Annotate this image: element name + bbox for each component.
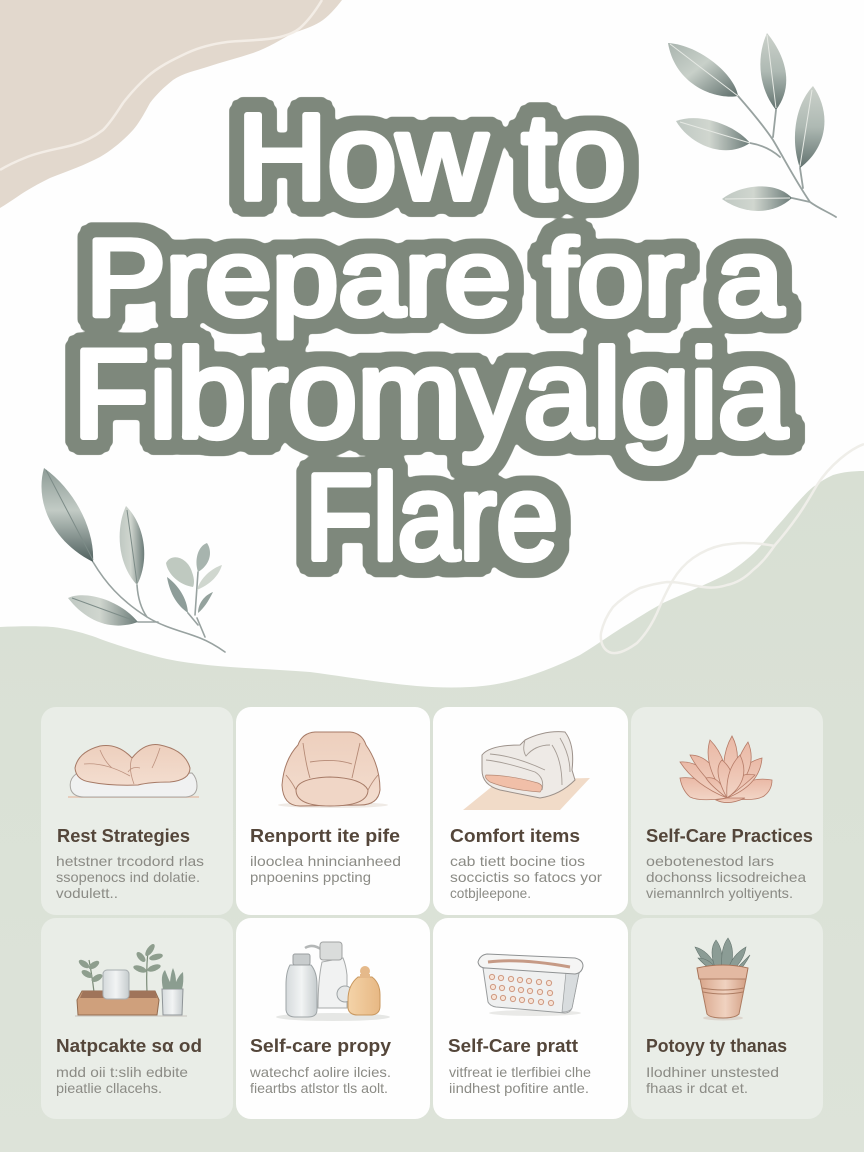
- description: pnpoenins ppcting: [250, 869, 371, 885]
- title: How to: [237, 89, 626, 225]
- heading: Self-care propy: [250, 1036, 391, 1056]
- heading: Comfort items: [450, 826, 580, 846]
- beige corner blob: [0, 0, 342, 208]
- title: [73, 89, 787, 585]
- description: pieatlie cllacehs.: [56, 1080, 162, 1096]
- panel: Self-Care Practices: [631, 707, 823, 915]
- description: [450, 853, 602, 901]
- icon: leaf branch bottom left: [41, 468, 225, 652]
- heading: Potoyy ty thanas: [646, 1036, 787, 1056]
- description: [56, 1064, 188, 1096]
- description: [250, 853, 401, 885]
- heading: Renportt ite pife: [250, 826, 400, 846]
- heading: Rest Strategies: [57, 826, 190, 846]
- description: [646, 1064, 779, 1096]
- panel: Renportt ite pife: [236, 707, 430, 915]
- description: cotbjleepone.: [450, 885, 531, 901]
- green wave background: [0, 444, 864, 1152]
- panel: Self-Care pratt: [433, 918, 628, 1119]
- description: ilooclea hnincianheed: [250, 853, 401, 869]
- panel: Self-care propy: [236, 918, 430, 1119]
- description: [56, 853, 204, 901]
- heading: Self-Care pratt: [448, 1036, 578, 1056]
- description: Ilodhiner unstested: [646, 1064, 779, 1080]
- heading: Self-Care Practices: [646, 826, 813, 846]
- description: iindhest pofitire antle.: [449, 1080, 589, 1096]
- description: dochonss licsodreichea: [646, 869, 806, 885]
- description: oebotenestod lars: [646, 853, 774, 869]
- title: Fibromyalgia: [73, 325, 787, 464]
- description: vitfreat ie tlerfibiei clhe: [449, 1064, 591, 1080]
- title: Prepare for a: [86, 217, 783, 339]
- icon: lotus flower: [680, 736, 772, 803]
- description: vodulett..: [56, 885, 118, 901]
- description: watechcf aolire ilcies.: [249, 1064, 391, 1080]
- panel: Potoyy ty thanas: [631, 918, 823, 1119]
- description: cab tiett bocine tios: [450, 853, 585, 869]
- panel: Rest Strategies: [41, 707, 233, 915]
- icon: leaf branch top right: [668, 33, 836, 217]
- description: viemannlrch yoltiyents.: [646, 885, 793, 901]
- panel: Comfort items: [433, 707, 628, 915]
- description: fieartbs atlstor tls aolt.: [250, 1080, 388, 1096]
- description: ssopenocs ind dolatie.: [56, 869, 200, 885]
- description: hetstner trcodord rlas: [56, 853, 204, 869]
- description: [249, 1064, 391, 1096]
- icon: potted succulent: [695, 938, 750, 1020]
- description: [449, 1064, 591, 1096]
- description: soccictis so fatocs yor: [450, 869, 602, 885]
- icon: pillow: [68, 745, 199, 798]
- description: fhaas ir dcat et.: [646, 1080, 748, 1096]
- heading: Natpcakte sα od: [56, 1036, 202, 1056]
- description: [646, 853, 806, 901]
- icon: planter box: [75, 943, 187, 1017]
- icon: cushion chair: [278, 732, 388, 808]
- panel: Natpcakte so od: [41, 918, 233, 1119]
- description: mdd oii t:slih edbite: [56, 1064, 188, 1080]
- icon: storage basket: [478, 954, 583, 1016]
- title: Flare: [305, 449, 558, 585]
- icon: bottles: [276, 942, 390, 1021]
- icon: folded towel: [463, 732, 590, 810]
